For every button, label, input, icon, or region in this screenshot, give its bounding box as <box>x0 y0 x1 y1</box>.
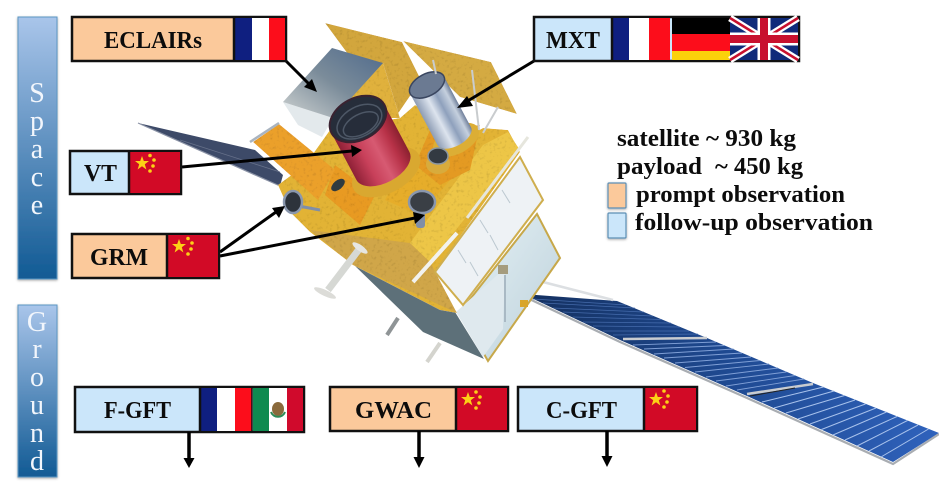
band: Ground: r <box>32 334 42 365</box>
flag: Germany <box>672 18 730 60</box>
flag: United Kingdom <box>730 18 798 60</box>
band: Space: p <box>30 106 44 137</box>
legend <box>608 182 873 238</box>
lower silver panel <box>456 214 560 361</box>
arrow: GRM right <box>220 212 425 256</box>
arrow: VT <box>182 145 362 167</box>
swatch: follow-up observation <box>608 213 626 238</box>
band: Ground <box>18 305 57 477</box>
label: GWAC: GWAC <box>355 398 432 424</box>
mass text: payload <box>617 154 703 180</box>
GRM detector right <box>409 191 435 228</box>
band: Ground: o <box>30 362 44 393</box>
VT telescope cylinder <box>315 83 429 208</box>
right white panel <box>413 137 543 305</box>
small camera <box>329 176 347 194</box>
GRM detector left <box>284 191 320 213</box>
swatch: prompt observation <box>608 183 626 208</box>
flag: Mexico <box>252 387 303 432</box>
flag: France <box>200 387 252 432</box>
label: GRM <box>72 234 219 278</box>
band: Space: c <box>31 162 43 193</box>
legend: follow-up observation <box>635 210 873 236</box>
label: C-GFT <box>518 387 697 431</box>
band: Ground: d <box>30 446 44 477</box>
flag: China <box>167 234 218 278</box>
label: ECLAIRs: ECLAIRs <box>104 28 202 54</box>
satellite illustration <box>138 23 939 464</box>
gold rear panels <box>325 23 517 118</box>
small baffle <box>426 148 450 174</box>
right solar array <box>508 268 939 464</box>
arrow: GRM left <box>220 206 285 252</box>
arrow: C-GFT down <box>602 431 612 467</box>
label: ECLAIRs <box>72 17 286 61</box>
left panel silver edge <box>250 123 279 142</box>
band: Space: S <box>29 78 45 109</box>
rods and small details <box>433 60 498 133</box>
label: VT <box>70 151 181 194</box>
band: Space <box>18 17 57 279</box>
arrow: ECLAIRs <box>286 61 317 92</box>
mass text <box>617 126 803 180</box>
flag: France <box>612 17 670 61</box>
band: Space: e <box>31 190 43 221</box>
dark body side <box>353 264 484 359</box>
band: Ground: n <box>30 418 44 449</box>
label: F-GFT <box>75 387 304 432</box>
label: GRM: GRM <box>90 245 148 271</box>
arrow: MXT <box>457 61 534 108</box>
mass text: satellite ~ 930 kg <box>617 126 796 152</box>
arrow: GWAC down <box>414 431 424 468</box>
legend: prompt observation <box>636 182 845 208</box>
left solar array <box>138 123 283 186</box>
label: GWAC <box>330 387 508 431</box>
antenna struts <box>313 240 440 362</box>
label: F-GFT: F-GFT <box>104 398 171 424</box>
MXT telescope cylinder <box>400 64 485 164</box>
flag: France <box>234 17 285 61</box>
band: Space: a <box>31 134 44 165</box>
band: Ground: G <box>27 307 47 338</box>
gold body <box>253 60 520 313</box>
label: MXT: MXT <box>546 28 600 54</box>
ECLAIRs module <box>283 48 383 137</box>
flag: China <box>644 387 696 431</box>
label: C-GFT: C-GFT <box>546 398 617 424</box>
flag: China <box>456 387 507 431</box>
label: VT: VT <box>84 161 117 187</box>
mass text: ~ 450 kg <box>715 154 803 180</box>
band: Ground: u <box>30 390 44 421</box>
label: MXT <box>534 17 799 61</box>
arrow: F-GFT down <box>184 432 194 468</box>
flag: China <box>129 151 180 194</box>
